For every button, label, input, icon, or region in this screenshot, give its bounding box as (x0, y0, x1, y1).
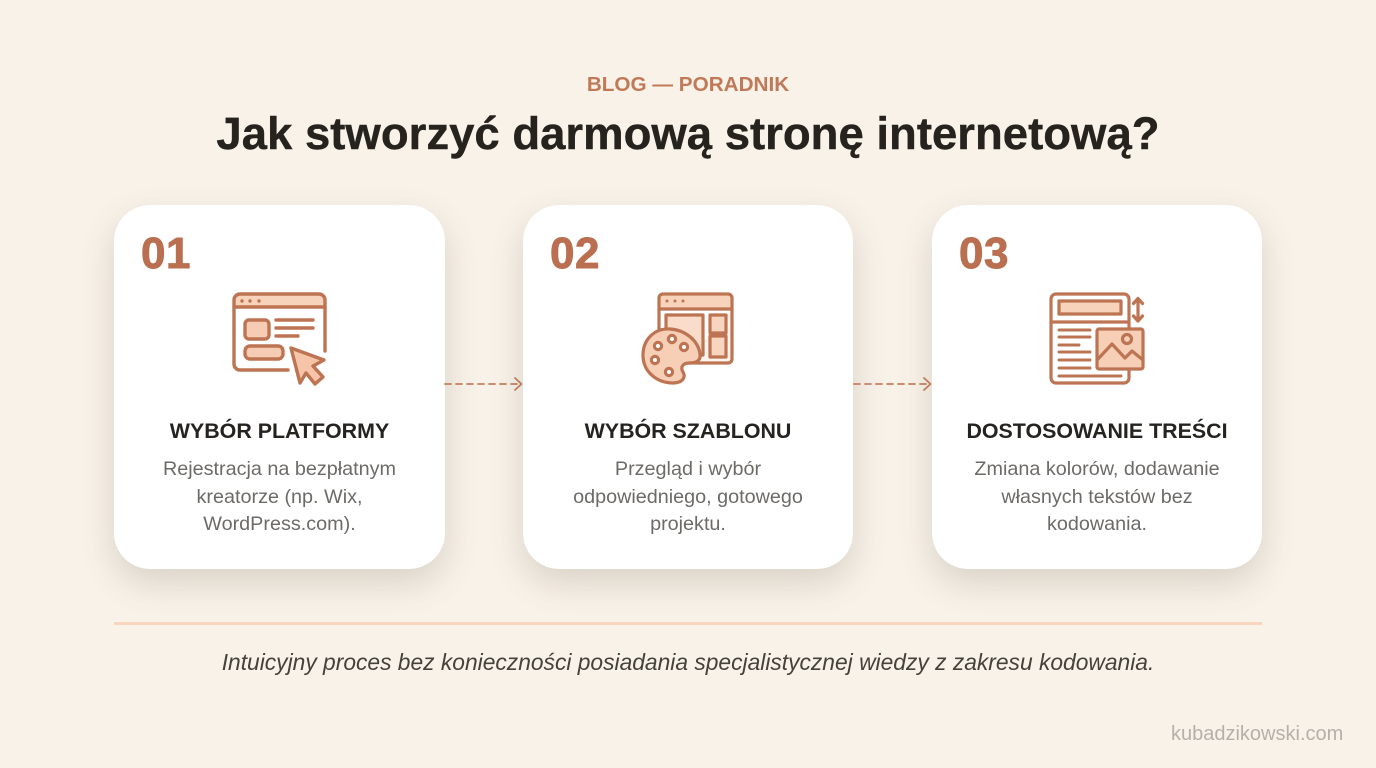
step description: WordPress.com). (203, 513, 356, 535)
footer note: Intuicyjny proces bez konieczności posiadania specjalistycznej wiedzy z zakresu kodowania. (222, 649, 1154, 675)
step number 02: 02 (550, 229, 600, 278)
step description (163, 458, 396, 535)
divider (114, 622, 1262, 625)
title: Jak stworzyć darmową stronę internetową? (216, 108, 1160, 159)
step description: Przegląd i wybór (615, 458, 761, 480)
step description: własnych tekstów bez (1001, 486, 1193, 508)
eyebrow label: BLOG — PORADNIK (587, 73, 789, 96)
step number 03: 03 (959, 229, 1009, 278)
panel: step 2 (523, 205, 853, 569)
step heading: WYBÓR SZABLONU (585, 419, 791, 443)
step description: projektu. (650, 513, 726, 535)
source credit: kubadzikowski.com (1171, 723, 1343, 745)
panel: step 3 (932, 205, 1262, 569)
step description (573, 458, 803, 535)
step description: odpowiedniego, gotowego (573, 486, 803, 508)
step number 01: 01 (141, 229, 191, 278)
step heading: DOSTOSOWANIE TREŚCI (966, 419, 1228, 443)
step description (974, 458, 1220, 535)
step description: kodowania. (1047, 513, 1147, 535)
panel: step 1 (114, 205, 445, 569)
step heading: WYBÓR PLATFORMY (170, 419, 389, 443)
step description: Zmiana kolorów, dodawanie (974, 458, 1220, 480)
step description: Rejestracja na bezpłatnym (163, 458, 396, 480)
step description: kreatorze (np. Wix, (196, 486, 362, 508)
